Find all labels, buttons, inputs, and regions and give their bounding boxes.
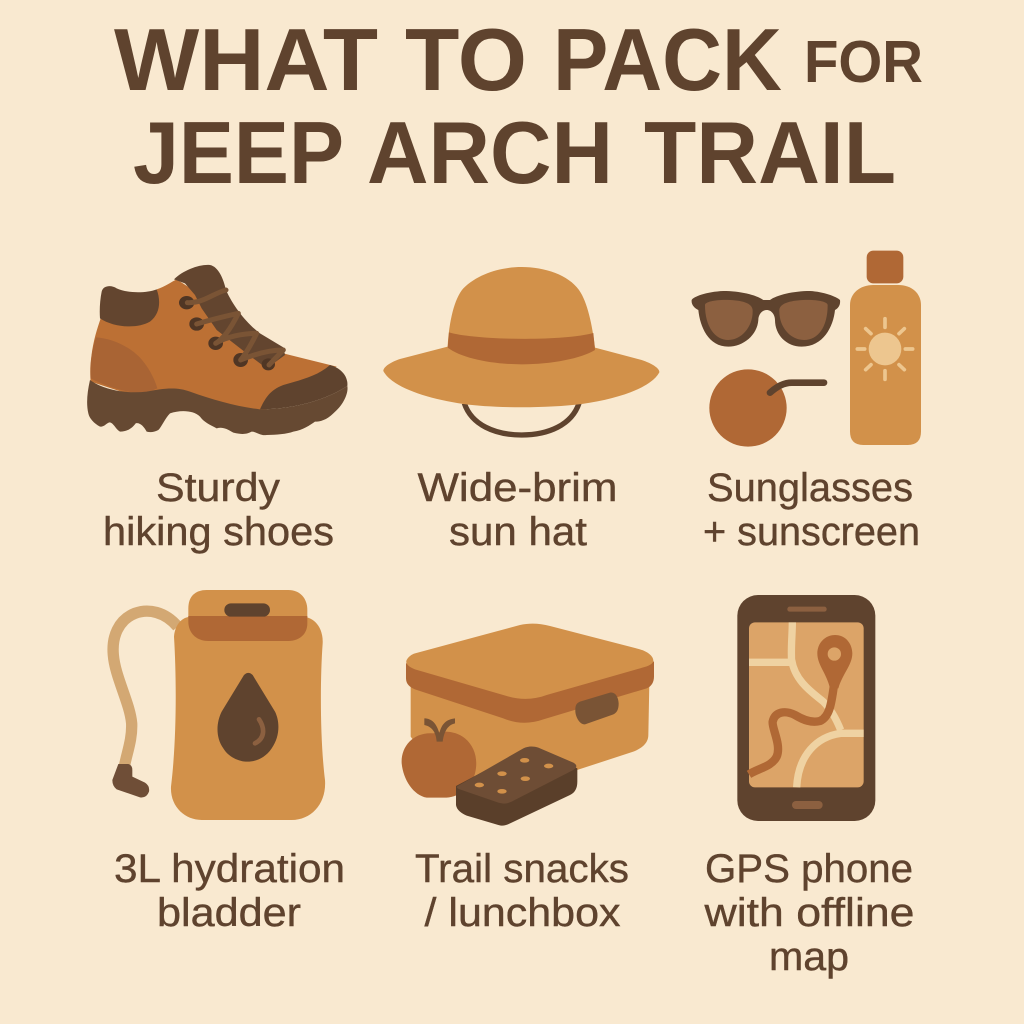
label: GPS phone: with offline [703,891,914,935]
map screen [749,622,864,787]
title [114,10,923,202]
label: GPS phone: map [769,935,849,979]
map pin [817,635,852,688]
label: sun hat [418,466,618,554]
label: hydration bladder: bladder [157,891,301,935]
title: FOR [804,29,923,95]
snack bar [456,746,577,826]
label: sunglasses sunscreen: Sunglasses [707,466,913,510]
label: sun hat: sun hat [449,510,587,554]
label: hydration bladder [114,847,345,935]
eyelets and laces [179,290,283,370]
label: GPS phone: GPS phone [705,847,913,891]
icon: sunglasses [692,291,840,347]
apple [402,718,476,798]
label: sunglasses sunscreen [703,466,920,554]
title: WHAT [114,10,378,109]
title: ARCH [367,103,613,202]
title: TO [405,10,527,109]
icon: sunscreen bottle [850,251,921,445]
label: trail snacks: / lunchbox [424,891,620,935]
label: hiking shoes: hiking shoes [103,510,334,554]
label: hiking shoes [103,466,334,554]
icon: hydration bladder [112,590,325,820]
icon: GPS phone with map [737,595,875,821]
water drop [217,673,278,762]
sun symbol [857,319,913,379]
label: hydration bladder: 3L hydration [114,847,345,891]
label: sunglasses sunscreen: + sunscreen [703,510,920,554]
icon: hiking boot [87,265,348,435]
icon: round lotion container [709,369,824,447]
label: trail snacks: Trail snacks [415,847,629,891]
label: trail snacks [415,847,629,935]
label: hiking shoes: Sturdy [156,466,280,510]
label: GPS phone [703,847,914,979]
icon: lunchbox and snacks [402,624,654,826]
title: JEEP [133,103,344,202]
title: PACK [553,10,782,109]
icon: sun hat [383,267,659,435]
title: TRAIL [644,103,896,202]
label: sun hat: Wide-brim [418,466,618,510]
